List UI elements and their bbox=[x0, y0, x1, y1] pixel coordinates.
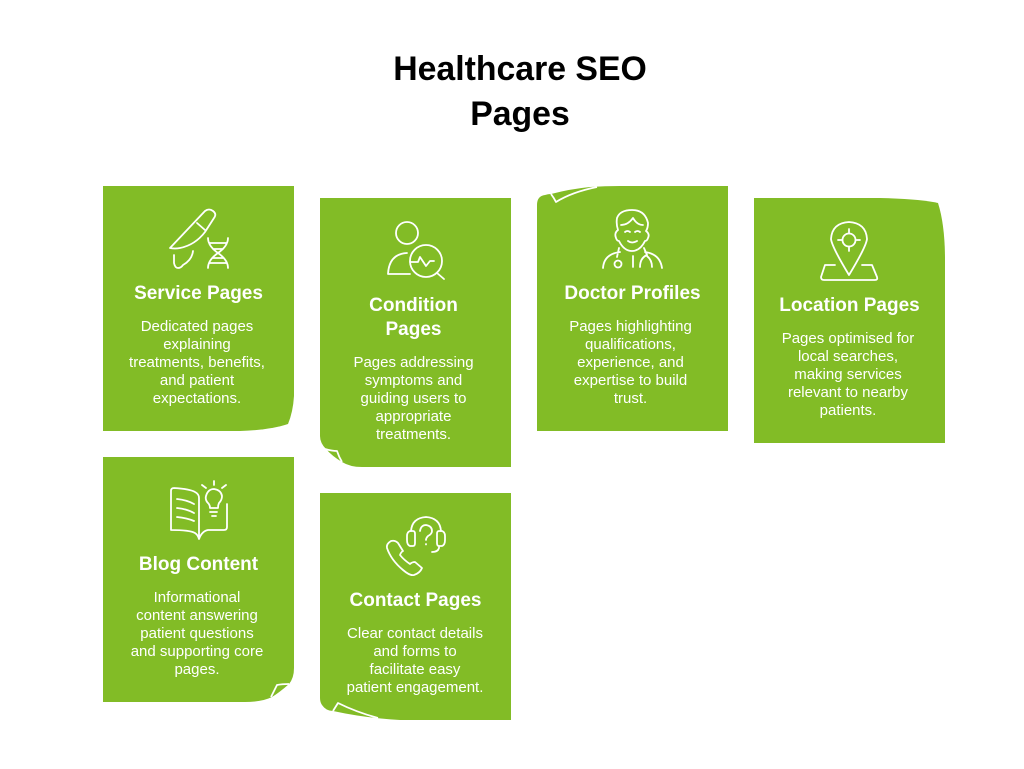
description: location pages: making services bbox=[794, 366, 902, 383]
description: blog content: and supporting core bbox=[131, 643, 263, 660]
description: blog content: pages. bbox=[174, 661, 220, 678]
icon: book and lightbulb bbox=[171, 481, 227, 539]
description: contact pages: facilitate easy bbox=[370, 661, 460, 678]
text block: blog content bbox=[131, 554, 263, 678]
description: doctor profiles: trust. bbox=[614, 390, 647, 407]
description: condition pages: treatments. bbox=[376, 426, 451, 443]
description: blog content: content answering bbox=[136, 607, 258, 624]
description: doctor profiles: qualifications, bbox=[585, 336, 676, 353]
description: service pages: explaining bbox=[163, 336, 231, 353]
description: location pages: relevant to nearby bbox=[788, 384, 908, 401]
panel: contact pages background bbox=[320, 493, 511, 720]
heading: blog content: Blog Content bbox=[139, 554, 258, 575]
description: location pages bbox=[782, 330, 914, 419]
panel: service pages background bbox=[103, 186, 294, 431]
blog content curl bbox=[271, 684, 289, 697]
description: location pages: patients. bbox=[820, 402, 876, 419]
heading: condition pages: Pages bbox=[386, 319, 441, 340]
description: contact pages: Clear contact details bbox=[347, 625, 483, 642]
description: service pages: and patient bbox=[160, 372, 234, 389]
description: blog content bbox=[131, 589, 263, 678]
description: condition pages: guiding users to bbox=[361, 390, 466, 407]
panel: location pages background bbox=[754, 198, 945, 443]
heading: condition pages: Condition bbox=[369, 295, 458, 316]
description: condition pages: appropriate bbox=[376, 408, 451, 425]
description: doctor profiles bbox=[569, 318, 692, 407]
description: location pages: local searches, bbox=[798, 348, 898, 365]
description: condition pages: Pages addressing bbox=[353, 354, 474, 371]
heading: doctor profiles: Doctor Profiles bbox=[564, 283, 701, 304]
icon: person with magnifier bbox=[388, 222, 444, 279]
heading: location pages: Location Pages bbox=[779, 295, 920, 316]
description: doctor profiles: Pages highlighting bbox=[569, 318, 692, 335]
description: blog content: patient questions bbox=[140, 625, 254, 642]
text block: condition pages bbox=[353, 295, 474, 443]
icon: doctor bbox=[603, 210, 662, 268]
description: service pages bbox=[129, 318, 265, 407]
icon: scalpel and DNA bbox=[170, 210, 228, 268]
text block: service pages bbox=[129, 283, 265, 407]
description: contact pages: patient engagement. bbox=[347, 679, 483, 696]
title: Pages bbox=[470, 95, 570, 133]
description: doctor profiles: expertise to build bbox=[574, 372, 687, 389]
title bbox=[393, 50, 647, 133]
text block: contact pages bbox=[347, 590, 483, 696]
description: location pages: Pages optimised for bbox=[782, 330, 914, 347]
description: service pages: expectations. bbox=[153, 390, 241, 407]
description: contact pages: and forms to bbox=[373, 643, 457, 660]
text block: location pages bbox=[779, 295, 920, 419]
panel: doctor profiles background bbox=[537, 186, 728, 431]
description: blog content: Informational bbox=[154, 589, 240, 606]
description: service pages: Dedicated pages bbox=[141, 318, 253, 335]
doctor profiles curl bbox=[551, 187, 597, 202]
icon: phone and headset bbox=[387, 517, 445, 575]
contact pages curl bbox=[333, 703, 378, 718]
description: service pages: treatments, benefits, bbox=[129, 354, 265, 371]
panel: condition pages background bbox=[320, 198, 511, 467]
heading: condition pages bbox=[369, 295, 458, 340]
condition pages curl bbox=[325, 449, 342, 462]
description: condition pages bbox=[353, 354, 474, 443]
description: condition pages: symptoms and bbox=[365, 372, 462, 389]
heading: contact pages: Contact Pages bbox=[350, 590, 481, 611]
panel: blog content background bbox=[103, 457, 294, 702]
heading: service pages: Service Pages bbox=[134, 283, 263, 304]
text block: doctor profiles bbox=[564, 283, 701, 407]
icon: map pin bbox=[821, 222, 877, 280]
description: contact pages bbox=[347, 625, 483, 696]
title: Healthcare SEO bbox=[393, 50, 647, 88]
description: doctor profiles: experience, and bbox=[577, 354, 684, 371]
